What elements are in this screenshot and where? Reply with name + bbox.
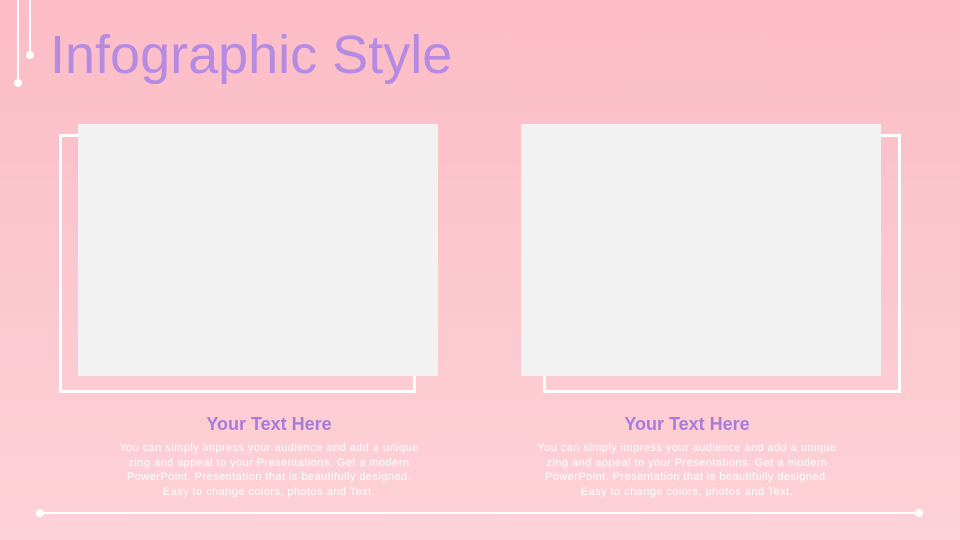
text right (537, 442, 837, 498)
decorative lines top-left (14, 0, 34, 87)
text left: zing and appeal to your Presentations. Get a modern (128, 456, 410, 468)
text right: zing and appeal to your Presentations. Get a modern (546, 456, 828, 468)
panel: left (59, 124, 438, 393)
photo placeholder right (521, 124, 881, 376)
photo placeholder left (78, 124, 438, 376)
bottom line (36, 509, 923, 517)
text left: Easy to change colors, photos and Text. (163, 486, 375, 498)
text left (119, 442, 419, 498)
title: Infographic Style (50, 25, 452, 85)
text left: PowerPoint. Presentation that is beautifully designed. (127, 471, 411, 483)
text right: Easy to change colors, photos and Text. (581, 486, 793, 498)
heading right: Your Text Here (624, 414, 750, 434)
text left: You can simply impress your audience and add a unique (119, 442, 419, 454)
text right: PowerPoint. Presentation that is beautifully designed. (545, 471, 829, 483)
heading left: Your Text Here (206, 414, 332, 434)
text right: You can simply impress your audience and add a unique (537, 442, 837, 454)
panel: right (521, 124, 901, 393)
